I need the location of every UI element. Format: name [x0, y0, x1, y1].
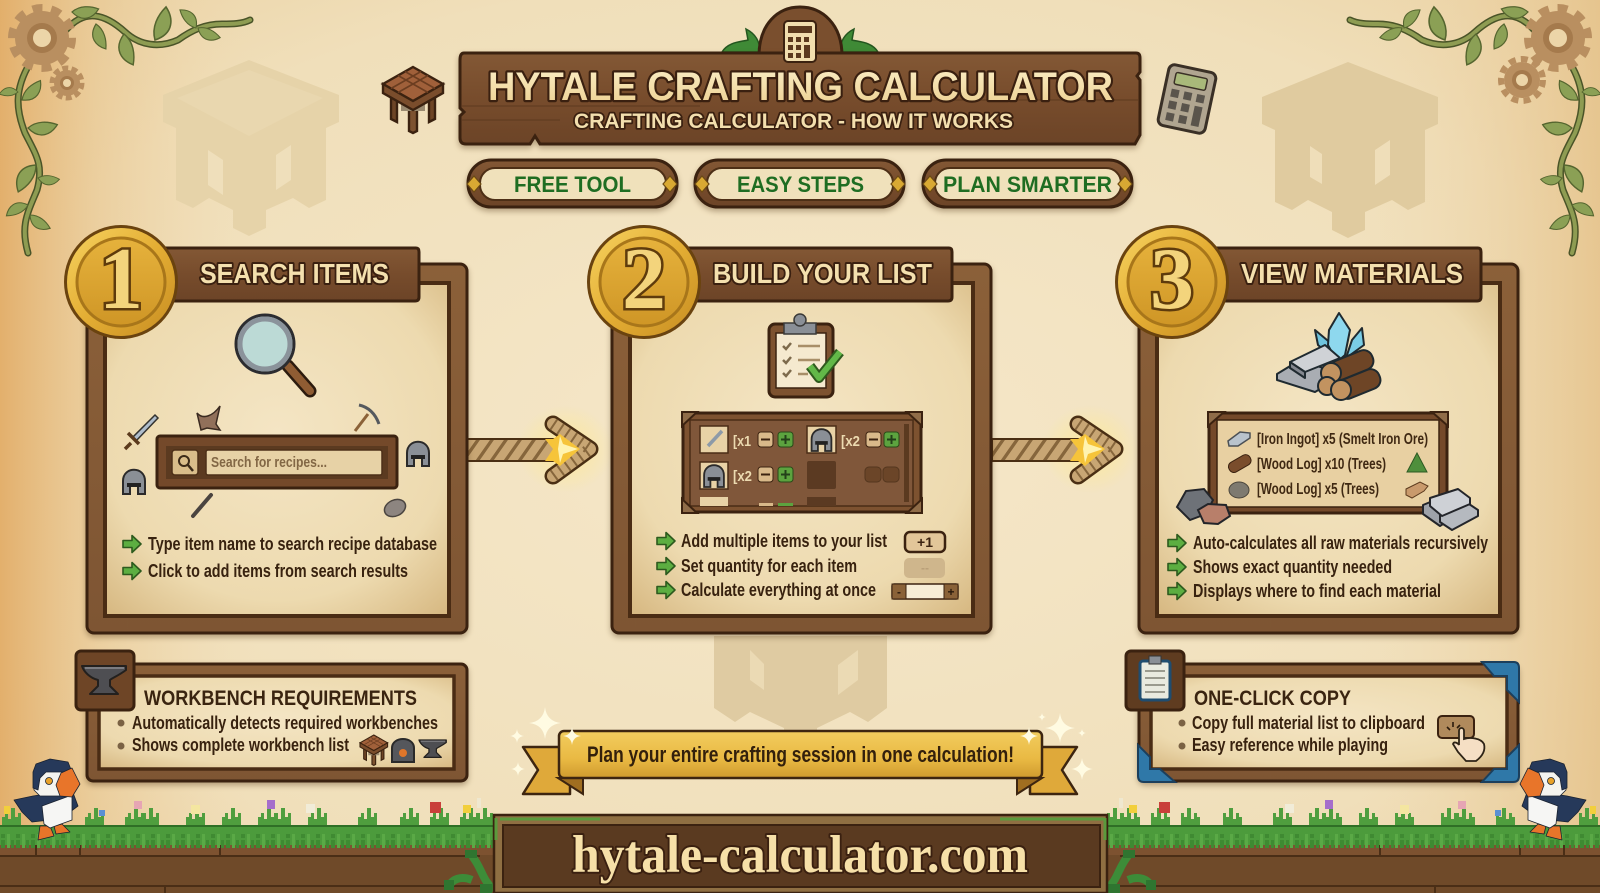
search bar: Search for recipes...: [211, 454, 327, 471]
step coin: [64, 225, 178, 339]
frame: [87, 264, 467, 633]
quantity stepper: +: [947, 585, 955, 599]
icon: dagger: [193, 495, 211, 516]
title text: HYTALE CRAFTING CALCULATOR: [488, 65, 1113, 109]
bullets: Shows complete workbench list: [132, 735, 349, 755]
icon: pickaxe: [355, 405, 379, 431]
puffin left: [14, 759, 80, 840]
title board: [460, 7, 1140, 144]
icon: sword: [125, 415, 158, 449]
ribbon banner: [510, 707, 1093, 794]
bullet list: Displays where to find each material: [1193, 581, 1441, 601]
panel: step 1 search items: [64, 225, 467, 633]
footer sign with url: [494, 815, 1107, 893]
slogan: Plan your entire crafting session in one calculation!: [587, 742, 1014, 767]
url: hytale-calculator.com: [572, 826, 1028, 884]
button: plus one: [905, 532, 945, 552]
ghost workbench right: [1262, 62, 1438, 238]
puffin right: [1520, 759, 1586, 840]
quantity stepper: -: [897, 585, 901, 599]
frame: [1139, 264, 1518, 633]
button: plus one: +1: [917, 534, 933, 550]
blue corners: [1138, 662, 1519, 782]
panel: one-click copy: [1126, 651, 1519, 782]
pill: free tool: FREE TOOL: [514, 172, 631, 197]
ground right with grass and flowers: [1100, 798, 1600, 893]
heading: VIEW MATERIALS: [1241, 258, 1463, 289]
bullet list: Add multiple items to your list: [681, 531, 887, 551]
inventory list: [682, 412, 922, 513]
arrow: step 2 to step 3: [992, 405, 1138, 493]
header plank: [680, 248, 952, 301]
frame: [612, 264, 991, 633]
material list: [Wood Log] x5 (Trees): [1257, 481, 1379, 498]
icon: clipboard with check: [769, 314, 840, 397]
pill: free tool: [467, 160, 677, 207]
bullet list: [123, 534, 437, 581]
button: disabled: --: [921, 561, 929, 575]
arch: [759, 7, 842, 56]
icon box: clipboard: [1126, 651, 1184, 710]
bullet list: [657, 531, 887, 600]
button: disabled: [904, 558, 945, 578]
step coin: 2: [622, 231, 666, 328]
step coin: [587, 225, 701, 339]
bullets: Copy full material list to clipboard: [1192, 713, 1425, 733]
icon: stone: [382, 496, 408, 520]
header plank: [1205, 248, 1481, 301]
icon: calculator on arch: [784, 21, 816, 62]
small gear top left: [52, 68, 82, 98]
icon: magnifying glass: [236, 315, 310, 391]
corner decoration top left: gears and vine: [0, 1, 250, 253]
icon box: anvil: [76, 651, 134, 710]
bullet list: Shows exact quantity needed: [1193, 557, 1392, 577]
panel: workbench requirements: [76, 651, 467, 781]
search bar: [157, 436, 397, 488]
material list: [Wood Log] x10 (Trees): [1257, 456, 1386, 473]
icon: winged item: [197, 406, 220, 430]
bullet list: Click to add items from search results: [148, 561, 408, 581]
header plank: [160, 248, 419, 301]
ghost workbench left: [163, 60, 339, 236]
icon: helmet right: [407, 442, 429, 466]
ground left with grass and flowers: [0, 798, 500, 893]
icon: workbench top left: [383, 67, 443, 133]
bullet list: Set quantity for each item: [681, 556, 857, 576]
icon: stones: [1177, 489, 1230, 524]
step coin: 3: [1150, 231, 1194, 328]
pill: plan smarter: [923, 160, 1132, 207]
bullets: Automatically detects required workbenches: [132, 713, 438, 733]
inventory list: [x1: [733, 433, 751, 450]
bullets: Easy reference while playing: [1192, 735, 1388, 755]
heading: BUILD YOUR LIST: [713, 258, 932, 289]
pill: easy steps: [695, 160, 905, 207]
icon: helmet left: [123, 470, 145, 494]
bullets: [118, 713, 438, 755]
ghost workbench bottom centre: [714, 636, 887, 735]
sparkles: [510, 707, 1093, 780]
heading: ONE-CLICK COPY: [1194, 687, 1351, 710]
material list: [1208, 412, 1448, 513]
icon: ingots: [1423, 489, 1478, 530]
step coin: [1115, 225, 1229, 339]
plank: [460, 53, 1140, 144]
bullet list: Calculate everything at once: [681, 580, 876, 600]
icon: click button with hand: [1438, 716, 1484, 761]
step coin: 1: [99, 231, 143, 328]
heading: SEARCH ITEMS: [200, 258, 389, 289]
icon: calculator top right: [1157, 64, 1217, 134]
inventory list: [x2: [733, 468, 752, 485]
bullets: [1178, 713, 1425, 755]
corner decoration top right: gears and vine: [1350, 1, 1600, 253]
leaves behind arch: [722, 29, 878, 52]
bullet list: Auto-calculates all raw materials recursively: [1193, 533, 1488, 553]
small gear top right: [1501, 59, 1543, 101]
panel: step 2 build your list: [587, 225, 991, 633]
pill: plan smarter: PLAN SMARTER: [943, 172, 1112, 197]
bullet list: [1168, 533, 1488, 601]
quantity stepper: [892, 584, 958, 599]
subtitle text: CRAFTING CALCULATOR - HOW IT WORKS: [574, 110, 1013, 133]
bullet list: Type item name to search recipe database: [148, 534, 437, 554]
arrow: step 1 to step 2: [467, 405, 613, 493]
icon: crystals, ingots and logs: [1277, 313, 1383, 402]
inventory list: [x2: [841, 433, 860, 450]
material list: [Iron Ingot] x5 (Smelt Iron Ore): [1257, 431, 1428, 448]
icons: bench, furnace, anvil: [360, 735, 446, 765]
panel: step 3 view materials: [1115, 225, 1518, 633]
heading: WORKBENCH REQUIREMENTS: [144, 687, 417, 710]
pill: easy steps: EASY STEPS: [737, 172, 864, 197]
